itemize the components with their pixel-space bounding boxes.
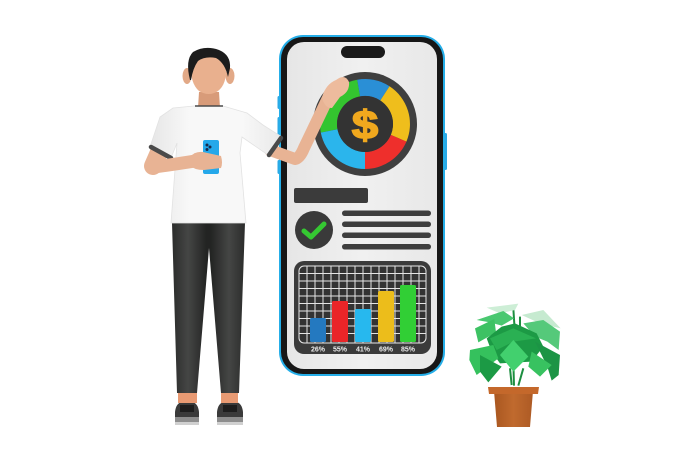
green segment [320, 80, 360, 133]
bar 55% [332, 301, 348, 342]
trousers [172, 223, 245, 393]
bar labels: 69% [379, 346, 394, 354]
bar 69% [378, 291, 394, 342]
ankles [178, 392, 238, 403]
check mark badge [295, 211, 333, 249]
donut chart with dollar sign [313, 72, 417, 176]
phone side buttons [278, 96, 447, 174]
collar [195, 105, 223, 107]
dark blue segment [357, 79, 390, 100]
bar 26% [310, 318, 326, 342]
light blue segment [321, 129, 365, 169]
donut centre [337, 96, 393, 152]
smartphone [278, 35, 447, 376]
bar labels: 55% [333, 346, 348, 354]
right arm pointing at chart [270, 100, 327, 159]
bar 85% [400, 285, 416, 342]
bar labels: 41% [356, 346, 371, 354]
flower pot [488, 387, 539, 427]
donut outer dark ring [313, 72, 417, 176]
phone screen [287, 42, 437, 369]
phone blue frame [279, 35, 445, 376]
shirt cuffs [151, 138, 281, 158]
bar chart panel [294, 261, 431, 354]
bar labels [311, 346, 416, 354]
bar 41% [355, 309, 371, 342]
chart grid [299, 266, 426, 343]
hair [188, 48, 230, 80]
held smartphone [203, 140, 219, 174]
phone black bezel [281, 37, 443, 374]
red segment [365, 135, 406, 169]
pointing hand [322, 77, 349, 108]
phone notch [341, 46, 385, 58]
yellow segment [380, 86, 410, 142]
left hand holding phone [189, 152, 222, 170]
dollar sign: $ [352, 103, 378, 148]
man presenting [150, 48, 349, 425]
text placeholder lines [342, 210, 431, 250]
ears [182, 68, 234, 84]
heading placeholder bar [294, 188, 368, 203]
left upper arm [153, 150, 160, 166]
potted plant [469, 304, 561, 427]
plant leaves [469, 304, 561, 386]
t-shirt [150, 106, 282, 223]
shoes [175, 402, 243, 425]
left forearm [154, 161, 195, 167]
chart background [294, 261, 431, 354]
bar labels: 26% [311, 346, 326, 354]
bar labels: 85% [401, 346, 416, 354]
neck [198, 92, 220, 108]
face [191, 55, 226, 94]
